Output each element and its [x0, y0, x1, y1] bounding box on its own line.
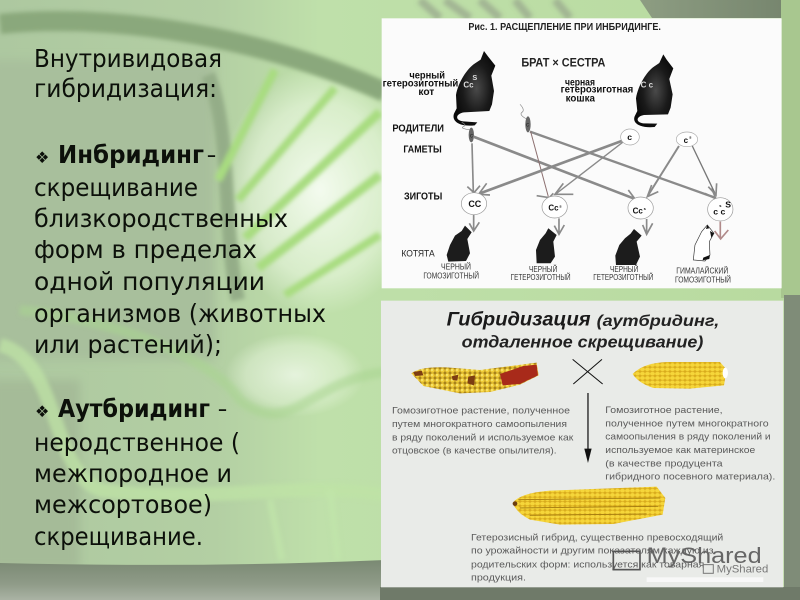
zygote circles: s: [719, 203, 722, 208]
text: paternal plant: путем многократного самоопыления: [392, 419, 567, 429]
cross symbol: [573, 359, 603, 384]
bullet: outbreeding definition: [34, 394, 240, 551]
zygote circles: s: [644, 206, 647, 211]
heading: intraspecific hybridization: Внутривидовая: [34, 44, 222, 73]
bullet: inbreeding definition: форм в пределах: [34, 235, 257, 264]
text: maternal plant: [605, 405, 775, 482]
kitten: black heterozygous 2: ГЕТЕРОЗИГОТНЫЙ: [593, 271, 653, 282]
row labels: РОДИТЕЛИ: [392, 124, 444, 135]
bullet: outbreeding definition: скрещивание.: [34, 522, 203, 551]
gametes: sperm and egg cells: c: [627, 132, 632, 142]
corn: heterotic hybrid cob: [513, 487, 665, 525]
gametes: sperm and egg cells: c: [684, 136, 689, 145]
gametes: sperm and egg cells: c: [526, 123, 529, 129]
father cat with label: Cc: [463, 81, 474, 90]
heading: intraspecific hybridization: [34, 44, 222, 103]
kitten: Himalayan homozygous: ГИМАЛАЙСКИЙ: [676, 264, 728, 275]
bullet: inbreeding definition: или растений);: [34, 330, 222, 359]
panel title: (аутбридинг,: [597, 313, 719, 330]
watermark: MyShared logo: [613, 543, 768, 582]
mother cat with label: [561, 54, 673, 127]
kitten: Himalayan homozygous: [675, 225, 731, 285]
mother cat with label: кошка: [566, 93, 595, 104]
father cat with label: черный: [409, 70, 445, 81]
text: maternal plant: (в качестве продуцента: [605, 458, 724, 468]
text: maternal plant: Гомозиготное растение,: [605, 405, 723, 415]
arrows: gametes to zygotes: [467, 132, 717, 199]
bullet: outbreeding definition: ❖: [35, 402, 49, 421]
heading: intraspecific hybridization: гибридизация:: [34, 74, 217, 103]
father cat with label: кот: [418, 87, 434, 98]
kitten: black heterozygous 2: [593, 229, 653, 282]
bullet: inbreeding definition: ❖: [35, 148, 49, 167]
gametes: sperm and egg cells: s: [689, 134, 692, 139]
bullet: inbreeding definition: Инбридинг: [58, 140, 204, 169]
kitten: black heterozygous 1: [511, 228, 571, 282]
mother cat with label: черная: [565, 78, 595, 89]
zygote circles: S: [725, 200, 731, 210]
row labels: КОТЯТА: [401, 249, 435, 259]
mother cat with label: гетерозиготная: [561, 85, 633, 96]
text: hybrid description: продукция.: [471, 572, 526, 582]
text: hybrid description: родительских форм: используется как товарная: [471, 559, 704, 569]
text: paternal plant: Гомозиготное растение, полученное: [392, 405, 570, 415]
corn: damaged paternal cob: [411, 363, 539, 393]
panel title: Гибридизация: [447, 309, 591, 330]
kitten: black heterozygous 1: ГЕТЕРОЗИГОТНЫЙ: [511, 271, 571, 282]
kitten: black heterozygous 2: ЧЕРНЫЙ: [610, 263, 638, 274]
kitten: black homozygous: ГОМОЗИГОТНЫЙ: [423, 269, 479, 280]
panel title: Рис. 1. РАСЩЕПЛЕНИЕ ПРИ ИНБРИДИНГЕ.: [468, 22, 661, 33]
text: paternal plant: отцовское (в качестве опылителя).: [392, 446, 557, 456]
zygote circles: CC: [468, 199, 482, 209]
bullet: inbreeding definition: близкородственных: [34, 204, 288, 233]
text: maternal plant: гибридного посевного материала).: [605, 472, 775, 482]
text: maternal plant: полученное путем многократного: [605, 418, 769, 428]
father cat with label: гетерозиготный: [383, 79, 458, 90]
zygote circles: Cc: [548, 203, 559, 212]
text: paternal plant: [392, 405, 574, 456]
zygote circles: c c: [713, 206, 726, 216]
zygote circles: Cc: [633, 206, 643, 215]
kitten: black homozygous: [423, 226, 479, 280]
row labels: ГАМЕТЫ: [403, 144, 442, 155]
panel: inbreeding diagram: [382, 18, 782, 288]
cross label: БРАТ × СЕСТРА: [521, 56, 606, 70]
gametes: sperm and egg cells: [462, 104, 698, 147]
row labels: [392, 124, 444, 259]
zygote circles: s: [559, 204, 562, 209]
row labels: ЗИГОТЫ: [404, 191, 443, 202]
panel: hybridization diagram: [381, 301, 783, 587]
bullet: inbreeding definition: скрещивание: [34, 173, 198, 202]
corn: maternal cob: [633, 362, 728, 389]
kitten: Himalayan homozygous: ГОМОЗИГОТНЫЙ: [675, 274, 731, 285]
bullet: inbreeding definition: [34, 140, 326, 359]
bullet: outbreeding definition: –: [218, 394, 227, 423]
bullet: outbreeding definition: межсортовое): [34, 490, 212, 519]
arrows: zygotes to kittens: [469, 215, 728, 239]
bullet: inbreeding definition: –: [207, 140, 216, 169]
text: hybrid description: [471, 532, 723, 582]
kittens: [423, 225, 731, 285]
bullet: inbreeding definition: организмов (животных: [34, 299, 326, 328]
bullet: outbreeding definition: неродственное (: [34, 428, 240, 457]
watermark: MyShared logo: MyShared: [717, 564, 768, 576]
panel title: отдаленное скрещивание): [462, 333, 703, 351]
text: maternal plant: используемое как материнское: [605, 445, 755, 455]
kitten: black heterozygous 1: ЧЕРНЫЙ: [529, 263, 557, 274]
bullet: inbreeding definition: одной популяции: [34, 267, 265, 296]
text: maternal plant: самоопыления в ряду поколений и: [605, 432, 771, 442]
text: hybrid description: Гетерозисный гибрид, существенно превосходящий: [471, 532, 723, 542]
text: paternal plant: в ряду поколений и используемое как: [392, 432, 574, 442]
father cat with label: S: [472, 73, 477, 82]
watermark: MyShared logo: MyShared: [647, 543, 762, 568]
zygote circles: [461, 193, 733, 221]
text: hybrid description: по урожайности и другим показателям каждую из: [471, 546, 714, 556]
father cat with label: [383, 51, 495, 126]
mother cat with label: C c: [641, 81, 654, 90]
bullet: outbreeding definition: межпородное и: [34, 459, 232, 488]
arrow: down to hybrid: [584, 393, 592, 463]
left text block: [34, 44, 326, 551]
panel title: [447, 309, 719, 351]
bullet: outbreeding definition: Аутбридинг: [58, 394, 210, 423]
kitten: black homozygous: ЧЕРНЫЙ: [441, 261, 471, 272]
gametes: sperm and egg cells: c: [470, 133, 473, 139]
